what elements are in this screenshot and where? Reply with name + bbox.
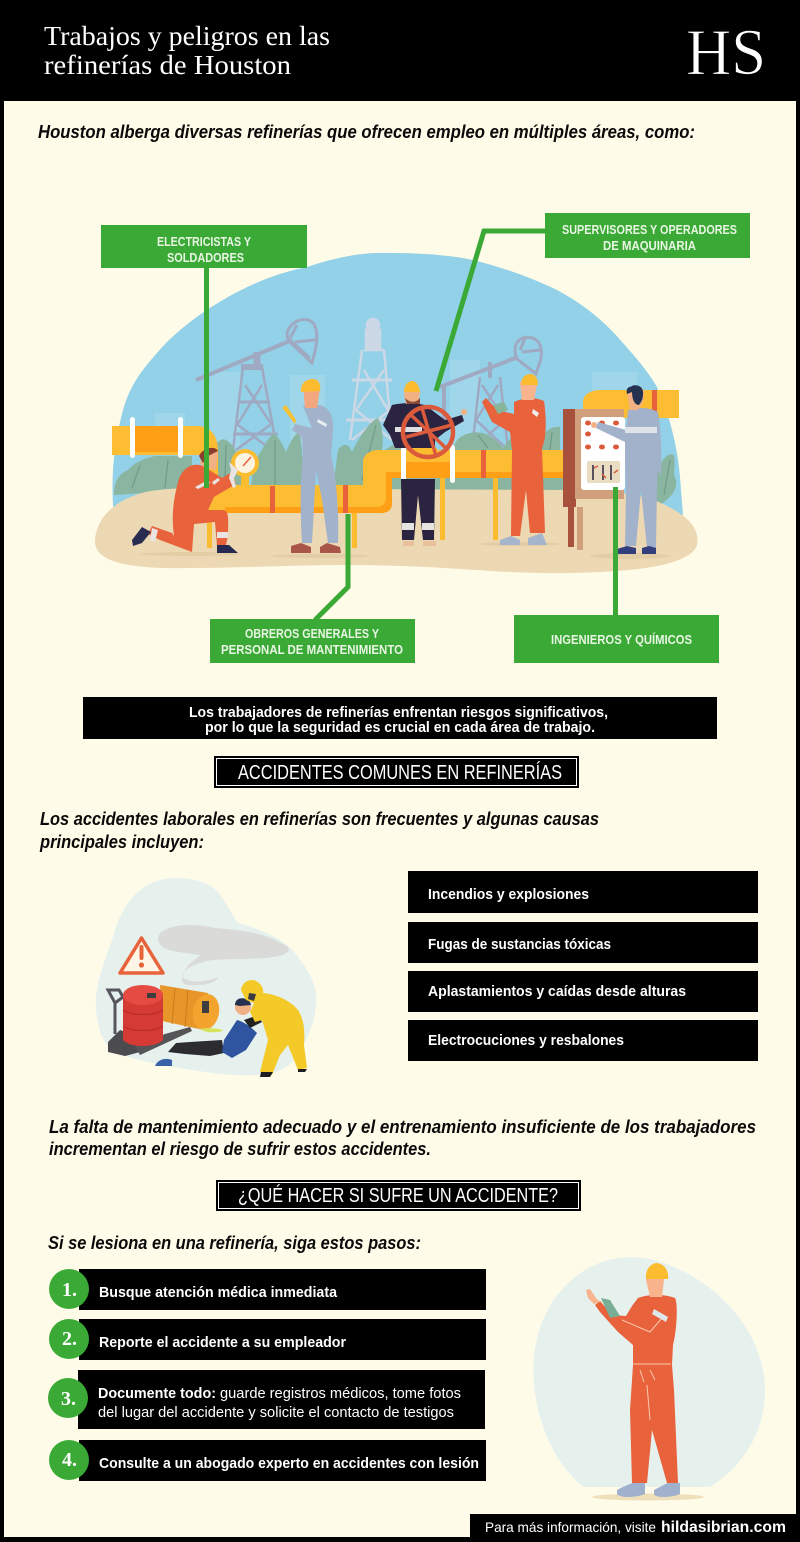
intro text: Houston alberga diversas refinerías que ofrecen empleo en múltiples áreas, como: [38,121,695,142]
yellow pipe left [112,426,218,492]
red barrel [123,985,163,1046]
cause 2 [408,922,758,963]
injured worker [155,998,262,1066]
connector line: obreros [315,514,348,620]
illustration: worker with tablet [533,1257,765,1500]
smoke [158,925,289,985]
label: ingenieros y quimicos [514,615,719,663]
logo: HS monogram: HS [686,16,766,89]
title [44,20,330,80]
gauge [231,449,259,485]
step 4: 4. [62,1449,77,1471]
connector line: supervisores [436,231,545,391]
orange barrel [160,985,222,1032]
text: accident causes intro [39,808,599,852]
step 3: Documente todo: [98,1385,216,1402]
footer: website credit: Para más información, visite [485,1519,656,1535]
yellow pipe right [583,390,679,418]
footer: website credit: hildasibrian.com [661,1519,786,1536]
heading: accidentes comunes: ACCIDENTES COMUNES EN REFINERÍAS [238,761,562,784]
step 3: del lugar del accidente y solicite el contacto de testigos [98,1404,454,1421]
bushes [114,418,676,505]
step 1: Busque atención médica inmediata [99,1284,338,1301]
step 2: 2. [62,1328,77,1350]
shadow strips [140,542,670,559]
cause 1 [408,871,758,913]
worker: red supervisor [482,374,547,545]
ground [95,487,698,573]
oil derrick centre [346,319,398,440]
label: supervisores y operadores: SUPERVISORES Y OPERADORES [562,223,737,237]
heading: que hacer [216,1180,581,1211]
text: steps intro: Si se lesiona en una refinería, siga estos pasos: [48,1232,421,1253]
title: refinerías de Houston [44,49,291,80]
faint city blocks [155,360,637,453]
connector line: electricistas [204,268,209,488]
white pipe clamps [130,417,455,483]
worker: panel operator [591,385,661,554]
pale blob [96,878,316,1075]
step 3: guarde registros médicos, tome fotos [220,1385,461,1402]
pipe supports [207,478,498,548]
worker: kneeling electrician [132,448,238,553]
list: accident causes [408,871,758,1061]
footer: website credit [470,1514,800,1542]
label: electricistas y soldadores: SOLDADORES [167,251,244,265]
spill [200,1028,223,1032]
connector line: ingenieros [613,487,618,616]
banner: risk statement [83,697,717,739]
sky blob [112,253,683,515]
label: obreros generales [210,619,415,663]
illustration: chemical accident [96,878,316,1077]
step 4 [49,1440,486,1481]
pale blob [533,1257,765,1487]
steps list [48,1269,486,1481]
cause 4 [408,1020,758,1061]
worker: valve operator [383,381,467,546]
text: maintenance warning [49,1116,756,1159]
text: maintenance warning: incrementan el riesgo de sufrir estos accidentes. [49,1138,431,1159]
step 2 [49,1319,486,1360]
illustration: refinery workers scene [95,253,698,573]
text: accident causes intro: principales incluyen: [39,831,204,852]
title: Trabajos y peligros en las [44,20,330,51]
step 3: 3. [61,1388,76,1410]
control panel [563,409,625,550]
cause 1: Incendios y explosiones [428,886,589,903]
label: supervisores y operadores: DE MAQUINARIA [603,239,696,253]
heading: accidentes comunes [214,756,579,788]
label: supervisores y operadores [545,213,750,258]
banner: risk statement: Los trabajadores de refinerías enfrentan riesgos significativos, [189,704,608,721]
step 2: Reporte el accidente a su empleador [99,1334,346,1351]
heading: que hacer: ¿QUÉ HACER SI SUFRE UN ACCIDENTE? [238,1184,558,1207]
label: obreros generales: PERSONAL DE MANTENIMIENTO [221,643,403,657]
step 1 [49,1269,486,1310]
pallet jack [108,990,192,1056]
oil pump left [196,319,317,450]
step 4: Consulte a un abogado experto en accidentes con lesión [99,1455,479,1472]
oil pump right [440,336,541,450]
text: accident causes intro: Los accidentes laborales en refinerías son frecuentes y algunas causas [40,808,599,829]
label: electricistas y soldadores [101,225,307,268]
label: electricistas y soldadores: ELECTRICISTAS Y [157,235,252,249]
cause 3 [408,971,758,1012]
worker: grey technician [282,379,341,553]
cause 2: Fugas de sustancias tóxicas [428,936,611,953]
cause 4: Electrocuciones y resbalones [428,1032,624,1049]
figure [595,1295,678,1483]
step 3 [48,1370,485,1429]
warning triangle [120,938,163,973]
yellow pipe main [200,450,565,513]
cause 3: Aplastamientos y caídas desde alturas [428,983,686,1000]
rescuer in yellow suit [241,980,307,1077]
text: maintenance warning: La falta de mantenimiento adecuado y el entrenamiento insuficiente de los trabajadores [49,1116,756,1137]
label: ingenieros y quimicos: INGENIEROS Y QUÍMICOS [551,632,692,647]
banner: risk statement: por lo que la seguridad es crucial en cada área de trabajo. [205,719,595,736]
label: obreros generales: OBREROS GENERALES Y [245,627,380,641]
step 1: 1. [62,1279,77,1301]
